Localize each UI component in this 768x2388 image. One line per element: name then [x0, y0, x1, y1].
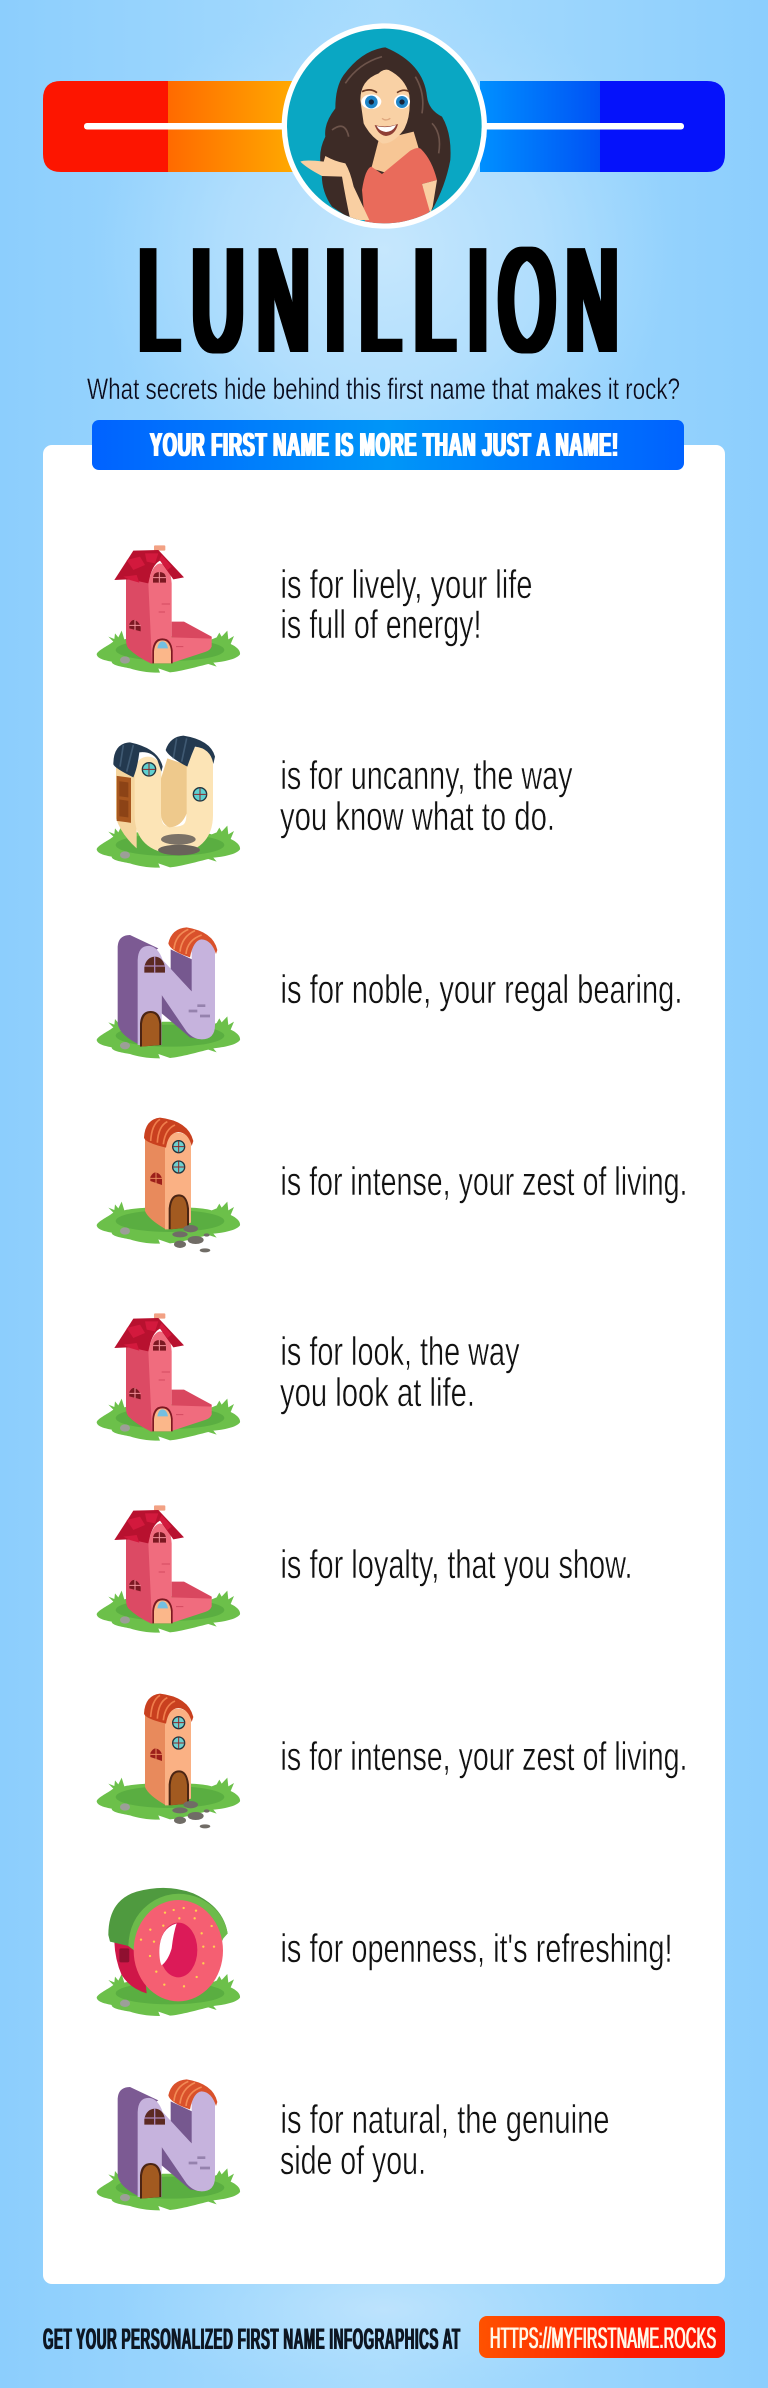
row: N for natural — [97, 2079, 610, 2210]
text: look — [280, 1330, 520, 1415]
banner — [92, 420, 684, 470]
text: natural: side of you. — [280, 2139, 426, 2183]
text: uncanny: you know what to do. — [280, 795, 555, 839]
icon: O house — [97, 1888, 240, 2016]
main white card — [43, 445, 725, 2284]
text: uncanny: is for uncanny, the way — [280, 754, 572, 798]
icon: I house — [97, 1118, 240, 1252]
avatar portrait — [282, 23, 487, 229]
row: I for intense — [97, 1118, 688, 1252]
icon: L house — [97, 1313, 240, 1441]
text: lively — [280, 563, 532, 647]
banner: YOUR FIRST NAME IS MORE THAN JUST A NAME! — [150, 426, 618, 463]
icon: I house — [97, 1694, 240, 1828]
text: look: you look at life. — [280, 1371, 475, 1415]
text: lively: is for lively, your life — [280, 563, 532, 607]
footer url button: HTTPS://MYFIRSTNAME.ROCKS — [490, 2321, 716, 2354]
row: L for loyalty — [97, 1505, 632, 1633]
icon: U house — [97, 736, 240, 868]
header colour bar — [43, 81, 725, 172]
text: uncanny — [280, 754, 572, 839]
icon: L house — [97, 1505, 240, 1633]
row: L for look — [97, 1313, 520, 1441]
text: look: is for look, the way — [280, 1330, 520, 1374]
text: lively: is full of energy! — [280, 603, 482, 647]
row: I for intense — [97, 1694, 688, 1828]
icon: L house — [97, 545, 240, 673]
row: L for lively — [97, 545, 532, 673]
text: loyalty: is for loyalty, that you show. — [280, 1543, 632, 1587]
text: natural: is for natural, the genuine — [280, 2098, 610, 2142]
icon: N house — [97, 2079, 240, 2210]
row: U for uncanny — [97, 736, 572, 868]
row: N for noble — [97, 927, 682, 1058]
icon: N house — [97, 927, 240, 1058]
footer call to action: GET YOUR PERSONALIZED FIRST NAME INFOGRAPHICS AT — [43, 2322, 460, 2355]
text: natural — [280, 2098, 610, 2183]
title: LUNILLION — [139, 217, 618, 383]
row: O for openness — [97, 1888, 672, 2016]
